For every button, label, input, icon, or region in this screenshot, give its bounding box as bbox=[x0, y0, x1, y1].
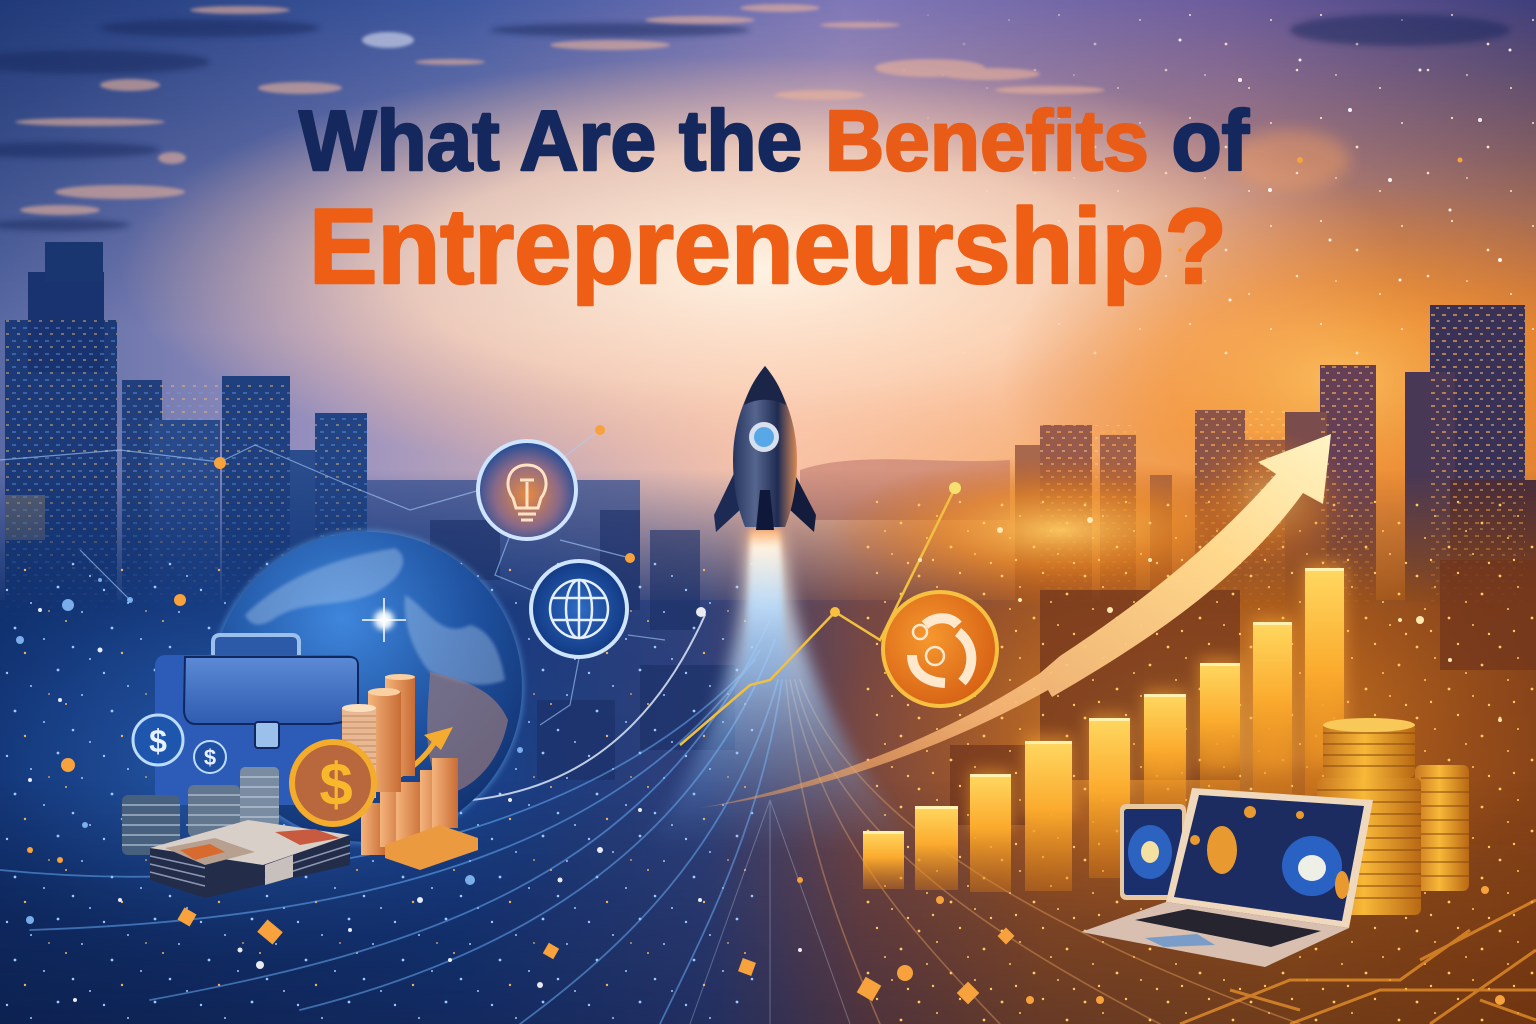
network lines bbox=[0, 430, 665, 725]
skyline: right orange city bbox=[800, 305, 1536, 620]
clouds bbox=[0, 4, 1510, 231]
icon: light bulb badge bbox=[478, 441, 576, 539]
skyline: left blue city bbox=[5, 242, 640, 620]
bar chart bbox=[863, 564, 1345, 892]
briefcase bbox=[155, 635, 358, 805]
icons: dollar bubbles: $ bbox=[204, 745, 216, 770]
gold coin stacks bbox=[1317, 718, 1469, 915]
background: sunset sky bbox=[0, 0, 1536, 605]
circuit floor bbox=[1180, 900, 1536, 1024]
gold dollar coin bbox=[292, 742, 374, 824]
globe bbox=[210, 530, 524, 844]
title line 1: What Are the Benefits of bbox=[299, 94, 1250, 189]
gold dollar coin: $ bbox=[319, 751, 353, 818]
gold coin towers bbox=[342, 674, 415, 798]
light streams bbox=[0, 615, 1300, 1024]
laptop bbox=[1081, 788, 1373, 967]
tablet bbox=[1120, 804, 1186, 900]
small gold bars and arrow bbox=[361, 727, 478, 870]
silver coin stacks bbox=[122, 767, 279, 855]
title line 2: Entrepreneurship? bbox=[309, 186, 1227, 306]
ground city glow bbox=[0, 455, 1536, 1024]
rocket bbox=[714, 366, 816, 532]
title bbox=[299, 94, 1250, 306]
icon: globe badge bbox=[531, 561, 627, 657]
icon: orange gear badge bbox=[883, 592, 997, 706]
big growth arrow bbox=[700, 430, 1355, 808]
rocket exhaust beam bbox=[640, 530, 920, 850]
chart line bbox=[680, 482, 961, 745]
stack of banknotes bbox=[150, 820, 350, 898]
icons: dollar bubbles bbox=[133, 715, 226, 773]
icons: dollar bubbles: $ bbox=[149, 723, 167, 759]
